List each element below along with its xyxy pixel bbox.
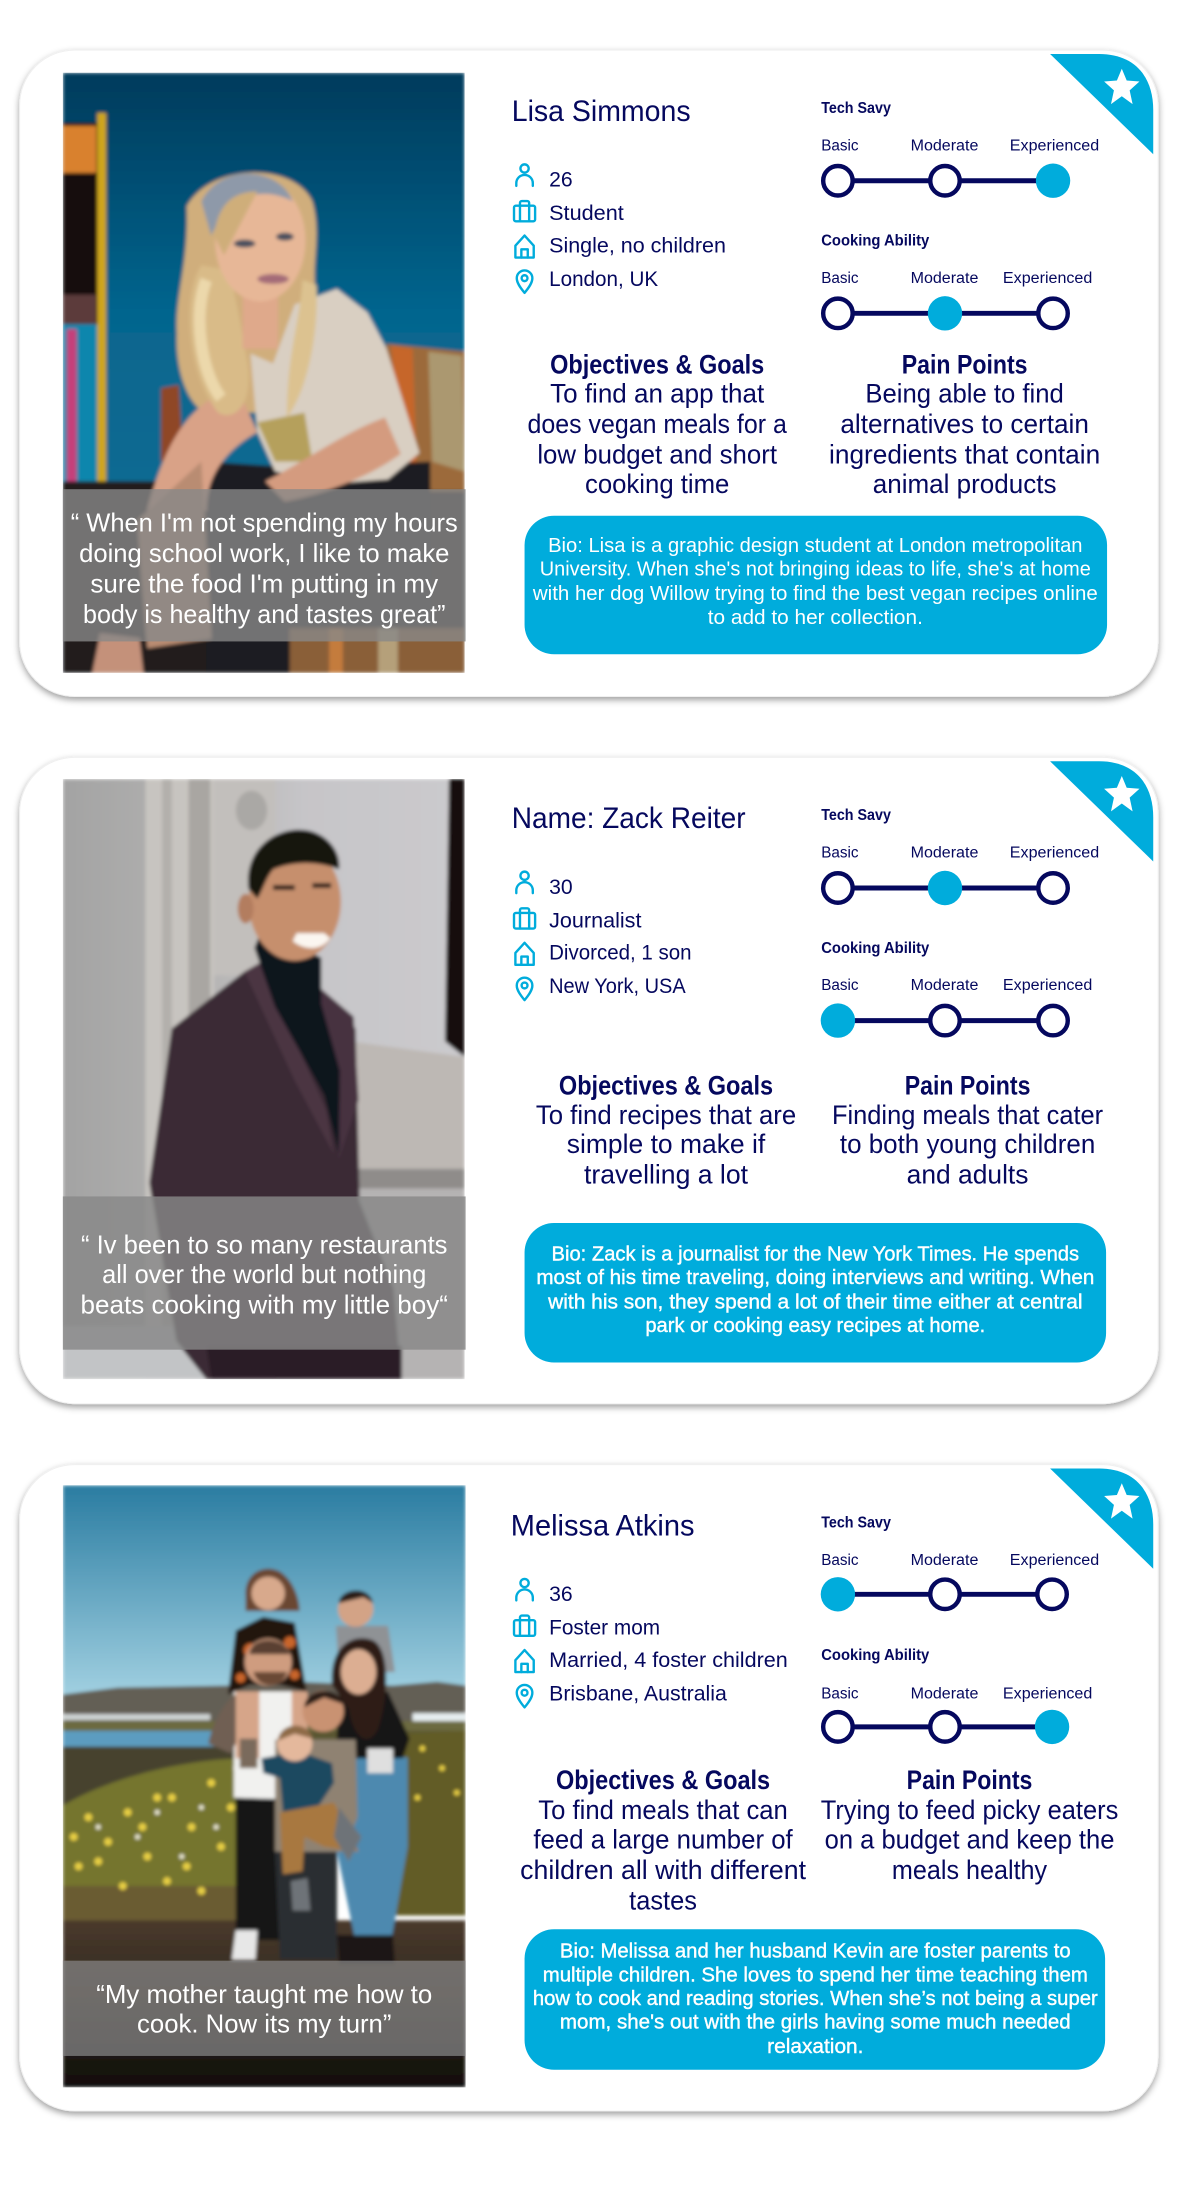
panel: Zack Reiter persona card: [20, 757, 1158, 1404]
slider: Cooking Ability: Experienced: [1003, 1685, 1092, 1702]
pain points: [829, 349, 1100, 499]
bio box: [525, 516, 1107, 654]
icon: location pin: [517, 978, 532, 1000]
panel: Melissa Atkins persona card: [20, 1465, 1158, 2111]
bio box: how to cook and reading stories. When she’s not being a super: [533, 1987, 1098, 2010]
pain points: meals healthy: [892, 1855, 1048, 1885]
objectives and goals: To find an app that: [550, 379, 765, 409]
bio box: University. When she's not bringing ideas to life, she's at home: [540, 558, 1091, 581]
icon: briefcase: [514, 201, 535, 221]
quote band: Lisa: [63, 489, 466, 641]
objectives and goals: feed a large number of: [533, 1825, 793, 1855]
slider: Cooking Ability: [821, 233, 1092, 331]
demographics list: Foster mom: [549, 1615, 660, 1640]
bio box: most of his time traveling, doing interviews and writing. When: [536, 1266, 1094, 1289]
slider: Tech Savy: [821, 807, 1099, 905]
pain points: Finding meals that cater: [832, 1100, 1103, 1130]
objectives and goals: cooking time: [585, 469, 729, 499]
objectives and goals: [528, 349, 787, 499]
demographics list: 36: [549, 1581, 573, 1606]
slider: Tech Savy: Basic: [821, 1552, 859, 1569]
quote band: Zack: “ Iv been to so many restaurants: [81, 1231, 447, 1259]
slider: Cooking Ability: Moderate: [911, 270, 979, 287]
icon: house: [515, 943, 534, 965]
objectives and goals: To find meals that can: [538, 1795, 788, 1825]
quote band: Lisa: doing school work, I like to make: [79, 540, 449, 568]
photo: Melissa family: [63, 1485, 466, 2087]
pain points: animal products: [873, 469, 1056, 499]
slider: Tech Savy: Tech Savy: [821, 1514, 891, 1531]
quote band: Melissa: cook. Now its my turn”: [137, 2010, 391, 2038]
pain points: alternatives to certain: [840, 409, 1089, 439]
slider: Tech Savy: Experienced: [1010, 137, 1099, 154]
objectives and goals: [536, 1070, 796, 1190]
pain points: on a budget and keep the: [825, 1825, 1114, 1855]
quote band: Lisa: “ When I'm not spending my hours: [71, 509, 458, 537]
pain points: Being able to find: [865, 379, 1064, 409]
icon: briefcase: [514, 908, 535, 929]
bio box: relaxation.: [767, 2035, 863, 2058]
bio box: Bio: Lisa is a graphic design student at London metropolitan: [548, 534, 1083, 557]
bio box: multiple children. She loves to spend her time teaching them: [543, 1963, 1088, 1986]
bio box: park or cooking easy recipes at home.: [645, 1314, 985, 1337]
photo: Lisa: [63, 73, 465, 673]
slider: Cooking Ability: Cooking Ability: [821, 940, 930, 957]
objectives and goals: children all with different: [520, 1855, 807, 1885]
quote band: Zack: all over the world but nothing: [102, 1261, 426, 1289]
icon: person: [516, 1579, 533, 1600]
icon: person: [516, 164, 533, 186]
demographics list: [514, 164, 726, 293]
name: Lisa Simmons: [512, 95, 691, 128]
objectives and goals: low budget and short: [537, 440, 778, 470]
icon: house: [515, 1650, 534, 1672]
demographics list: Married, 4 foster children: [549, 1647, 788, 1672]
slider: Cooking Ability: Basic: [821, 270, 859, 287]
icon: briefcase: [514, 1616, 535, 1636]
quote band: Melissa: “My mother taught me how to: [96, 1981, 432, 2009]
objectives and goals: Objectives & Goals: [550, 349, 764, 379]
demographics list: Single, no children: [549, 232, 726, 257]
slider: Cooking Ability: Basic: [821, 977, 859, 994]
demographics list: Divorced, 1 son: [549, 940, 692, 965]
slider: Tech Savy: [821, 100, 1099, 198]
demographics list: 26: [549, 167, 573, 192]
objectives and goals: Objectives & Goals: [556, 1765, 770, 1795]
pain points: ingredients that contain: [829, 440, 1100, 470]
demographics list: [514, 872, 692, 1000]
bio box: with her dog Willow trying to find the best vegan recipes online: [532, 582, 1098, 605]
name: Melissa Atkins: [511, 1509, 694, 1542]
objectives and goals: simple to make if: [567, 1129, 766, 1159]
slider: Cooking Ability: [821, 940, 1092, 1038]
slider: Tech Savy: Tech Savy: [821, 100, 891, 117]
icon: person: [516, 872, 533, 893]
demographics list: 30: [549, 874, 573, 899]
pain points: Pain Points: [905, 1070, 1030, 1100]
bio box: Bio: Melissa and her husband Kevin are foster parents to: [560, 1940, 1071, 1963]
bio box: mom, she's out with the girls having some much needed: [560, 2010, 1071, 2033]
slider: Cooking Ability: Basic: [821, 1685, 859, 1702]
ribbon with star: [1050, 54, 1153, 154]
quote band: Lisa: body is healthy and tastes great”: [83, 601, 445, 629]
slider: Cooking Ability: Moderate: [911, 977, 979, 994]
objectives and goals: travelling a lot: [584, 1160, 749, 1190]
slider: Cooking Ability: Cooking Ability: [821, 1647, 930, 1664]
demographics list: [514, 1579, 788, 1707]
slider: Cooking Ability: Cooking Ability: [821, 233, 930, 250]
demographics list: Student: [549, 200, 624, 225]
quote band: Zack: [63, 1196, 466, 1350]
objectives and goals: tastes: [629, 1886, 697, 1916]
demographics list: Brisbane, Australia: [549, 1680, 728, 1705]
pain points: Trying to feed picky eaters: [821, 1795, 1118, 1825]
pain points: [832, 1070, 1103, 1190]
photo: Zack: [63, 779, 465, 1379]
pain points: to both young children: [840, 1129, 1095, 1159]
bio box: with his son, they spend a lot of their time either at central: [547, 1290, 1083, 1313]
slider: Tech Savy: Tech Savy: [821, 807, 891, 824]
slider: Tech Savy: Moderate: [911, 1552, 979, 1569]
slider: Tech Savy: Experienced: [1010, 1552, 1099, 1569]
slider: Tech Savy: Basic: [821, 137, 859, 154]
pain points: Pain Points: [902, 349, 1027, 379]
bio box: [525, 1223, 1106, 1362]
name: Name: Zack Reiter: [512, 802, 746, 835]
objectives and goals: To find recipes that are: [536, 1100, 796, 1130]
objectives and goals: Objectives & Goals: [559, 1070, 773, 1100]
slider: Cooking Ability: Experienced: [1003, 270, 1092, 287]
slider: Tech Savy: Moderate: [911, 845, 979, 862]
ribbon with star: [1050, 761, 1153, 861]
pain points: and adults: [907, 1160, 1028, 1190]
demographics list: Journalist: [549, 907, 641, 932]
ribbon with star: [1050, 1469, 1153, 1569]
demographics list: London, UK: [549, 266, 659, 291]
bio box: [525, 1929, 1105, 2070]
pain points: Pain Points: [907, 1765, 1032, 1795]
slider: Tech Savy: Experienced: [1010, 845, 1099, 862]
slider: Cooking Ability: Moderate: [911, 1685, 979, 1702]
icon: house: [515, 236, 534, 258]
quote band: Melissa: [63, 1961, 466, 2056]
quote band: Lisa: sure the food I'm putting in my: [90, 570, 438, 598]
objectives and goals: [520, 1765, 807, 1916]
objectives and goals: does vegan meals for a: [528, 409, 787, 439]
demographics list: New York, USA: [549, 973, 686, 998]
quote band: Zack: beats cooking with my little boy“: [81, 1291, 448, 1319]
icon: location pin: [517, 1685, 532, 1707]
panel: Lisa Simmons persona card: [20, 50, 1158, 696]
icon: location pin: [517, 270, 532, 293]
bio box: to add to her collection.: [708, 606, 923, 629]
slider: Tech Savy: Moderate: [911, 137, 979, 154]
slider: Cooking Ability: Experienced: [1003, 977, 1092, 994]
bio box: Bio: Zack is a journalist for the New York Times. He spends: [552, 1242, 1079, 1265]
slider: Tech Savy: Basic: [821, 845, 859, 862]
pain points: [821, 1765, 1118, 1885]
slider: Cooking Ability: [821, 1647, 1092, 1744]
slider: Tech Savy: [821, 1514, 1099, 1611]
